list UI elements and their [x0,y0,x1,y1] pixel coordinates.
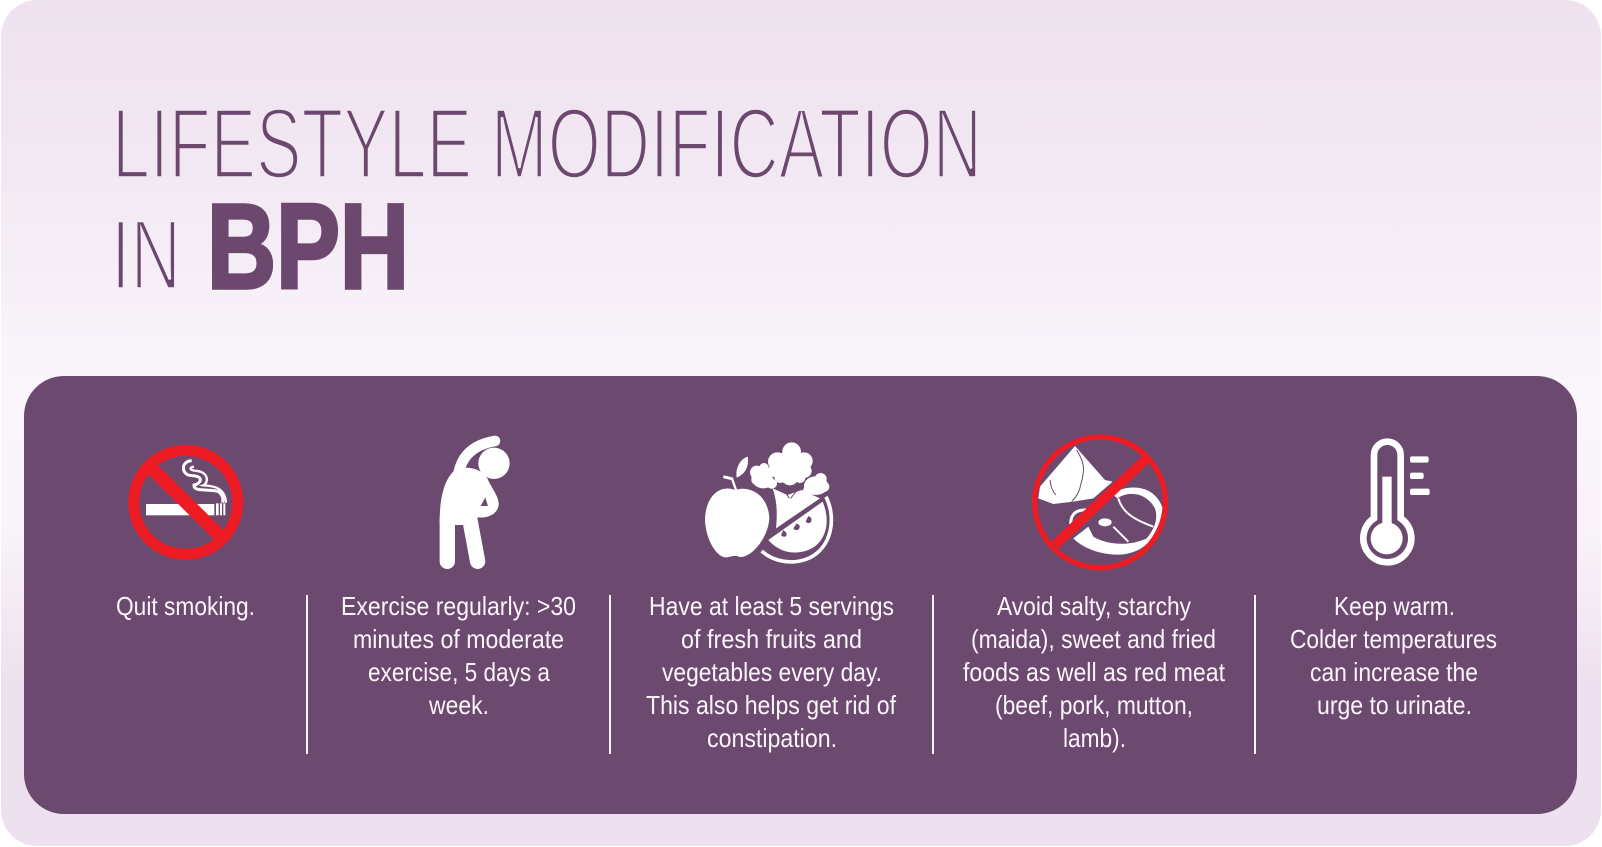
text: foods to avoid: foods as well as red meat [963,657,1226,687]
title word: BPH: BPH [207,178,409,314]
text: fruits and vegetables: This also helps get rid of [646,690,897,720]
icon: fruits and vegetables [705,442,831,562]
text: exercise regularly [341,591,576,720]
text: fruits and vegetables: vegetables every day. [662,657,882,687]
icon: exercise figure [440,441,510,561]
text: quit smoking: Quit smoking. [116,591,255,621]
text: keep warm: Keep warm. [1334,591,1455,621]
text: keep warm: can increase the [1310,657,1478,687]
title word: in: IN [111,199,181,310]
text: keep warm [1290,591,1497,720]
text: exercise regularly: week. [428,690,489,720]
text: foods to avoid: (beef, pork, mutton, [995,690,1193,720]
text: keep warm: urge to urinate. [1317,690,1472,720]
text: foods to avoid: Avoid salty, starchy [997,591,1191,621]
dividers [307,595,1255,754]
text: foods to avoid: (maida), sweet and fried [971,624,1216,654]
text: exercise regularly: exercise, 5 days a [368,657,550,687]
text: foods to avoid: lamb). [1063,723,1126,753]
text: fruits and vegetables: constipation. [707,723,837,753]
text: exercise regularly: Exercise regularly: >30 [341,591,576,621]
title line: lifestyle modification: LIFESTYLE MODIFICATION [112,88,982,200]
text: foods to avoid [963,591,1226,753]
text: fruits and vegetables: of fresh fruits and [681,624,862,654]
title [111,88,982,314]
text: keep warm: Colder temperatures [1290,624,1497,654]
icon: no smoking [134,450,238,554]
text: fruits and vegetables: Have at least 5 servings [649,591,894,621]
text: exercise regularly: minutes of moderate [353,624,564,654]
main panel [24,376,1577,814]
text: fruits and vegetables [646,591,897,753]
icon: no salty, starchy or red meat foods [1035,437,1165,568]
icon: thermometer [1363,442,1430,562]
